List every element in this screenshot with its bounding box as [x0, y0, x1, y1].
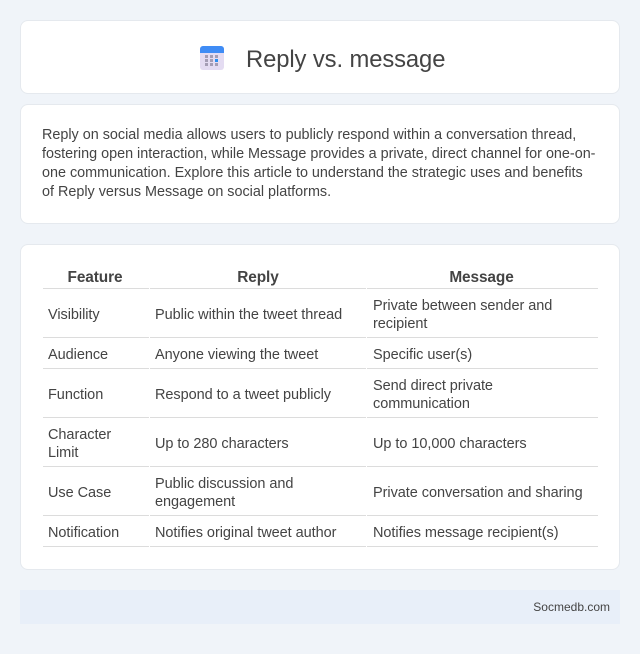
panel: introduction — [20, 104, 620, 224]
row: Visibility — [48, 298, 552, 332]
row: Visibility: recipient — [373, 316, 427, 332]
row: Character Limit: Character — [48, 427, 111, 443]
table header: Feature — [68, 269, 122, 286]
row: Function: Function — [48, 387, 103, 403]
table header: Message — [449, 269, 514, 286]
row: Character Limit — [48, 427, 527, 461]
text block: introduction: one communication. Explore this article to understand the strategic uses and benefits — [42, 165, 583, 181]
row: Use Case — [48, 476, 583, 510]
text block: introduction: Reply on social media allows users to publicly respond within a conversation thread, — [42, 127, 576, 143]
row: Character Limit: Up to 10,000 characters — [373, 436, 527, 452]
table header — [68, 269, 514, 286]
footer bar — [20, 590, 620, 624]
text block: introduction: of Reply versus Message on social platforms. — [42, 184, 331, 200]
row: Function: Send direct private — [373, 378, 493, 394]
title: Reply vs. message — [246, 46, 445, 73]
row: Notification: Notifies message recipient(s) — [373, 525, 559, 541]
row: Notification — [48, 525, 559, 541]
row: Visibility: Private between sender and — [373, 298, 552, 314]
row: Character Limit: Limit — [48, 445, 78, 461]
panel: comparison table — [20, 244, 620, 570]
row: Notification: Notifies original tweet author — [155, 525, 336, 541]
row: Audience — [48, 347, 472, 363]
row: Notification: Notification — [48, 525, 119, 541]
text block: introduction: fostering open interaction, while Message provides a private, direct channel for one-on- — [42, 146, 595, 162]
row: Visibility: Visibility — [48, 307, 100, 323]
panel: title card — [20, 20, 620, 94]
text block: introduction — [42, 127, 595, 200]
row: Audience: Audience — [48, 347, 108, 363]
row: Character Limit: Up to 280 characters — [155, 436, 289, 452]
icon: calendar — [200, 46, 224, 70]
row: Function: communication — [373, 396, 470, 412]
row: Use Case: Private conversation and sharing — [373, 485, 583, 501]
row: Function: Respond to a tweet publicly — [155, 387, 331, 403]
row: Use Case: engagement — [155, 494, 235, 510]
footer text: Socmedb.com — [533, 600, 610, 614]
row: Function — [48, 378, 493, 412]
row: Use Case: Public discussion and — [155, 476, 293, 492]
row: Audience: Specific user(s) — [373, 347, 472, 363]
row: Visibility: Public within the tweet thread — [155, 307, 342, 323]
table header: Reply — [237, 269, 279, 286]
row: Use Case: Use Case — [48, 485, 111, 501]
row: Audience: Anyone viewing the tweet — [155, 347, 318, 363]
